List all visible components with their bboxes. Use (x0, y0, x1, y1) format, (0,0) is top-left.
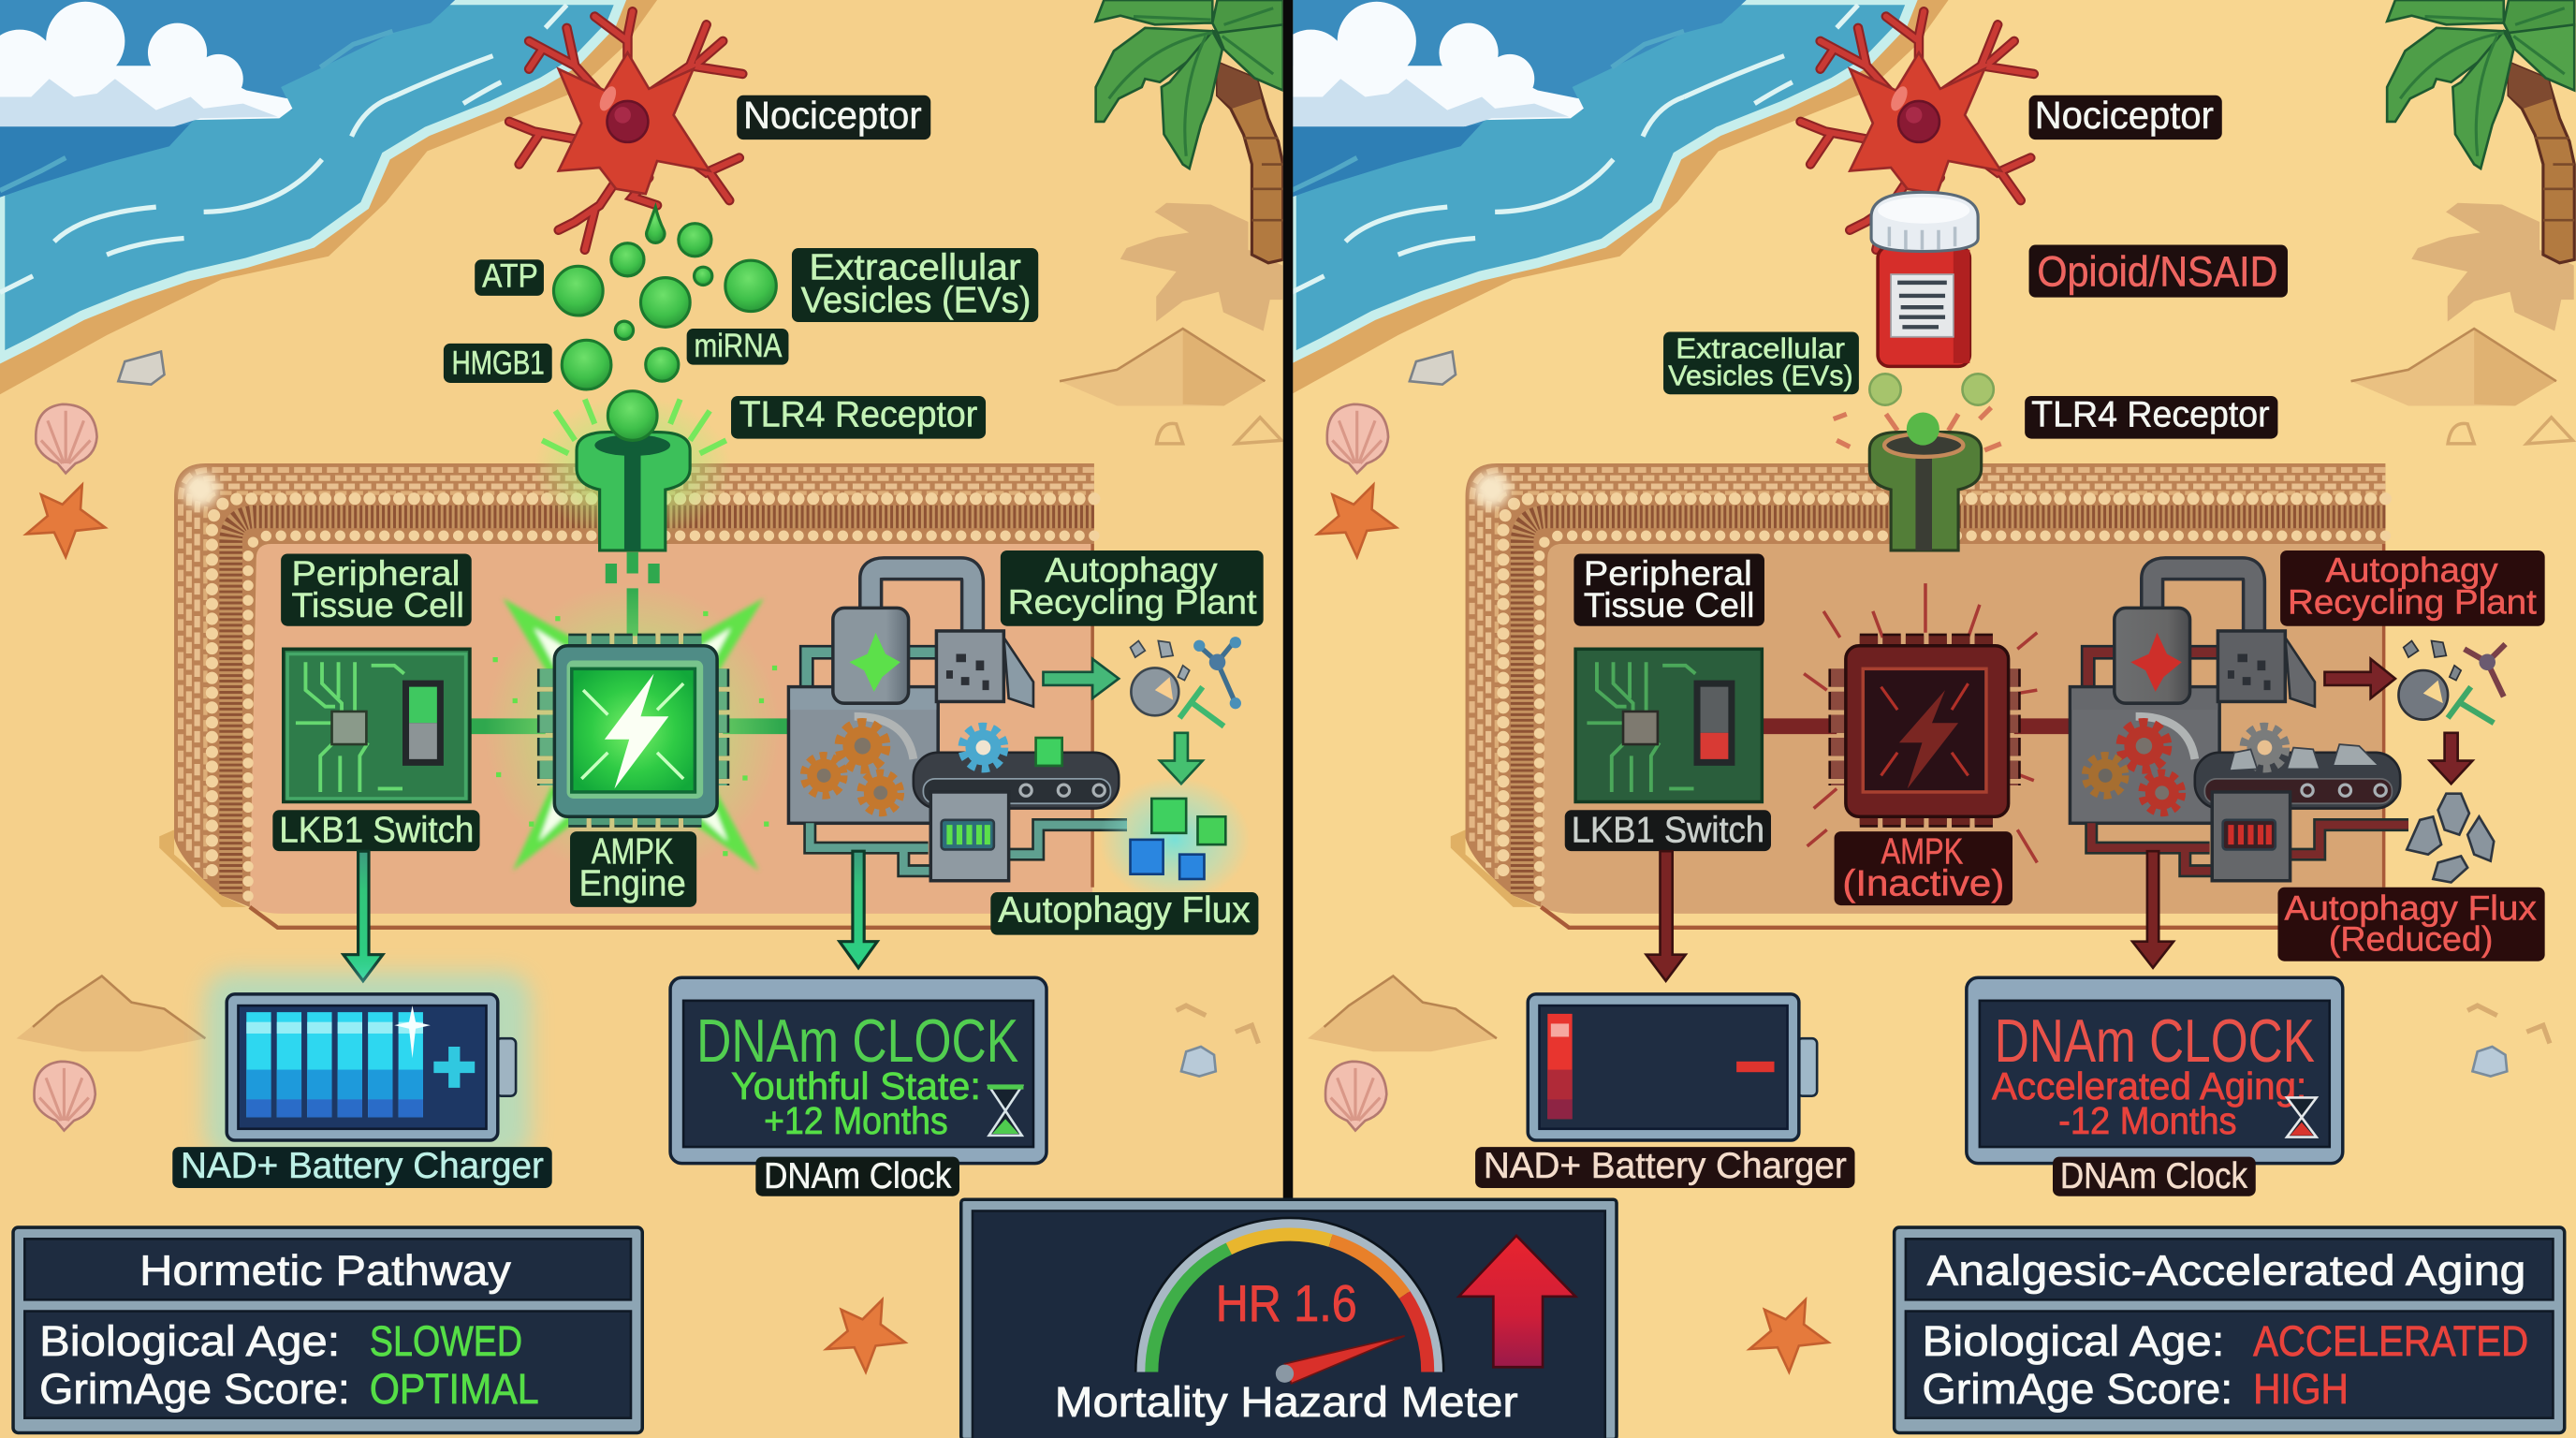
icon: starfish right (1749, 1299, 1828, 1372)
icon: blue gear and green cube (962, 726, 1062, 769)
chart: hazard gauge (1142, 1225, 1438, 1384)
arrow: plant to debris (2324, 659, 2395, 698)
label: AMPK engine (570, 831, 696, 907)
label: LKB1 switch: LKB1 Switch (1572, 810, 1764, 850)
arrow: hazard up (1459, 1236, 1575, 1367)
label: HMGB1: HMGB1 (452, 345, 545, 381)
label: autophagy recycling plant (2280, 550, 2545, 626)
label: TLR4 receptor: TLR4 Receptor (739, 394, 977, 434)
icon: nociceptor neuron (1801, 11, 2034, 250)
label: DNAm clock: DNAm Clock (2060, 1156, 2248, 1196)
arrow: LKB1 to battery (344, 851, 383, 981)
icon: accumulated debris (2398, 640, 2506, 723)
label: autophagy recycling plant: Recycling Plant (1008, 583, 1257, 622)
label: extracellular vesicles (792, 247, 1038, 322)
arrow: debris to rocks (2430, 733, 2472, 784)
text: biological age slowed: SLOWED (370, 1317, 522, 1365)
icon: unrecycled rocks (2407, 794, 2494, 882)
centre divider (1283, 0, 1293, 1199)
panel: mortality hazard meter (961, 1199, 1617, 1438)
icon: orange gears (804, 723, 900, 813)
icon: opioid/NSAID pill bottle (1871, 192, 1978, 366)
label: nociceptor: Nociceptor (743, 94, 922, 137)
label: AMPK inactive (1835, 831, 2012, 905)
text: biological age slowed: Biological Age: (39, 1317, 340, 1365)
label: extracellular vesicles (small): Vesicles (EVs) (1668, 359, 1853, 391)
panel: DNAm clock youthful: Youthful State: (731, 1064, 981, 1108)
label: AMPK inactive: (Inactive) (1842, 864, 2004, 904)
text: biological age accelerated: Biological Age: (1922, 1317, 2224, 1365)
text: grimage high: GrimAge Score: (1922, 1365, 2232, 1413)
panel: analgesic-accelerated aging summary (1895, 1227, 2565, 1432)
icon: hourglass (2287, 1097, 2317, 1137)
label: extracellular vesicles: Vesicles (EVs) (801, 280, 1031, 320)
label: ATP: ATP (482, 257, 538, 294)
text: biological age accelerated (1922, 1317, 2528, 1365)
arrow: debris to flux (1160, 733, 1203, 784)
label: autophagy flux reduced: (Reduced) (2329, 920, 2493, 959)
panel: DNAm clock accelerated (1967, 977, 2343, 1164)
label: TLR4 receptor: TLR4 Receptor (2031, 394, 2270, 434)
connector: LKB1 to AMPK to plant (1761, 722, 2073, 731)
icon: stalled recycling plant (2070, 568, 2408, 881)
icon: muted TLR4 receptor (1834, 407, 2001, 550)
heading: analgesic-accelerated aging: Analgesic-Accelerated Aging (1927, 1246, 2525, 1294)
label: DNAm clock: DNAm Clock (764, 1156, 952, 1196)
label: autophagy recycling plant (1001, 550, 1264, 626)
right panel sand (1293, 0, 2576, 1438)
label: nociceptor: Nociceptor (2035, 94, 2214, 137)
left beach scenery (0, 0, 1283, 1131)
icon: stuck gear and rocks on belt (2230, 726, 2378, 770)
icon: damaged protein debris (1131, 637, 1241, 726)
icon: faded vesicles (1869, 374, 1994, 405)
icon: depleted NAD+ battery (1528, 994, 1817, 1140)
icon: inactive AMPK chip (1804, 583, 2037, 862)
label: NAD+ battery charger: NAD+ Battery Charger (181, 1146, 544, 1186)
label: AMPK engine: Engine (579, 864, 686, 904)
arrow: plant to debris (1043, 659, 1119, 698)
panel: hormetic pathway summary (13, 1227, 642, 1432)
heading: hormetic pathway: Hormetic Pathway (139, 1246, 511, 1294)
text: grimage high: HIGH (2253, 1365, 2349, 1413)
icon: hourglass (988, 1084, 1023, 1136)
label: NAD+ battery charger: NAD+ Battery Charger (1484, 1146, 1847, 1186)
panel: DNAm clock accelerated: DNAm CLOCK (1995, 1006, 2315, 1075)
icon: LKB1 switch off (1575, 649, 1762, 801)
label: peripheral tissue cell: Peripheral (292, 554, 460, 593)
panel: DNAm clock youthful (670, 977, 1046, 1164)
right beach scenery (1275, 0, 2574, 1131)
peripheral tissue cell membrane (159, 463, 1094, 928)
panel: DNAm clock youthful: +12 Months (764, 1099, 948, 1142)
panel: DNAm clock youthful: DNAm CLOCK (696, 1006, 1018, 1075)
icon: starfish left (827, 1299, 905, 1372)
text: biological age accelerated: ACCELERATED (2253, 1317, 2528, 1365)
label: extracellular vesicles: Extracellular (809, 247, 1021, 287)
text: grimage optimal: OPTIMAL (370, 1365, 539, 1413)
icon: activated TLR4 receptor (534, 391, 731, 636)
panel: DNAm clock accelerated: -12 Months (2058, 1099, 2237, 1142)
caption: mortality hazard meter: Mortality Hazard Meter (1055, 1378, 1518, 1426)
arrow: LKB1 to battery (1647, 851, 1686, 981)
gauge needle (1276, 1336, 1405, 1384)
icon: glowing AMPK engine chip (485, 583, 781, 879)
label: extracellular vesicles (small): Extracellular (1676, 332, 1845, 365)
text: grimage optimal (39, 1365, 539, 1413)
panel: DNAm clock accelerated: Accelerated Aging: (1992, 1064, 2306, 1108)
icon: released vesicles (553, 207, 776, 389)
icon: minus sign (1736, 1062, 1775, 1072)
label: peripheral tissue cell: Tissue Cell (292, 586, 464, 624)
icon: nociceptor neuron (509, 11, 742, 250)
label: peripheral tissue cell: Peripheral (1584, 554, 1752, 593)
label: peripheral tissue cell (1573, 553, 1764, 626)
label: AMPK inactive: AMPK (1881, 831, 1964, 872)
label: autophagy recycling plant: Recycling Plant (2288, 583, 2537, 622)
panel: hormetic pathway scene (159, 11, 1264, 1196)
icon: red and brown gears (2086, 723, 2182, 813)
icon: LKB1 switch circuit board (284, 649, 470, 801)
label: extracellular vesicles (small) (1663, 332, 1859, 394)
arrow: plant to DNAm clock (2132, 851, 2174, 968)
label: opioid/NSAID: Opioid/NSAID (2037, 247, 2277, 295)
label: autophagy recycling plant: Autophagy (2325, 550, 2498, 589)
label: miRNA: miRNA (695, 328, 783, 364)
icon: recycled cubes (1099, 777, 1251, 902)
icon: autophagy recycling plant (788, 568, 1127, 881)
text: biological age slowed (39, 1317, 522, 1365)
label: peripheral tissue cell (281, 553, 472, 626)
label: autophagy flux reduced (2277, 888, 2545, 961)
label: AMPK engine: AMPK (592, 831, 674, 872)
peripheral tissue cell membrane (suppressed) (1451, 463, 2385, 928)
panel: analgesic scene (1451, 11, 2545, 1196)
label: autophagy flux reduced: Autophagy Flux (2284, 888, 2537, 927)
label: autophagy recycling plant: Autophagy (1045, 550, 1218, 589)
label: autophagy flux: Autophagy Flux (998, 890, 1251, 931)
connector: LKB1 to AMPK to plant (470, 722, 792, 731)
label: peripheral tissue cell: Tissue Cell (1584, 586, 1754, 624)
label: LKB1 switch: LKB1 Switch (279, 810, 474, 850)
icon: full NAD+ battery (205, 973, 531, 1160)
value: HR 1.6: HR 1.6 (1216, 1275, 1357, 1332)
text: grimage optimal: GrimAge Score: (39, 1365, 350, 1413)
arrow: plant to DNAm clock (840, 851, 877, 968)
